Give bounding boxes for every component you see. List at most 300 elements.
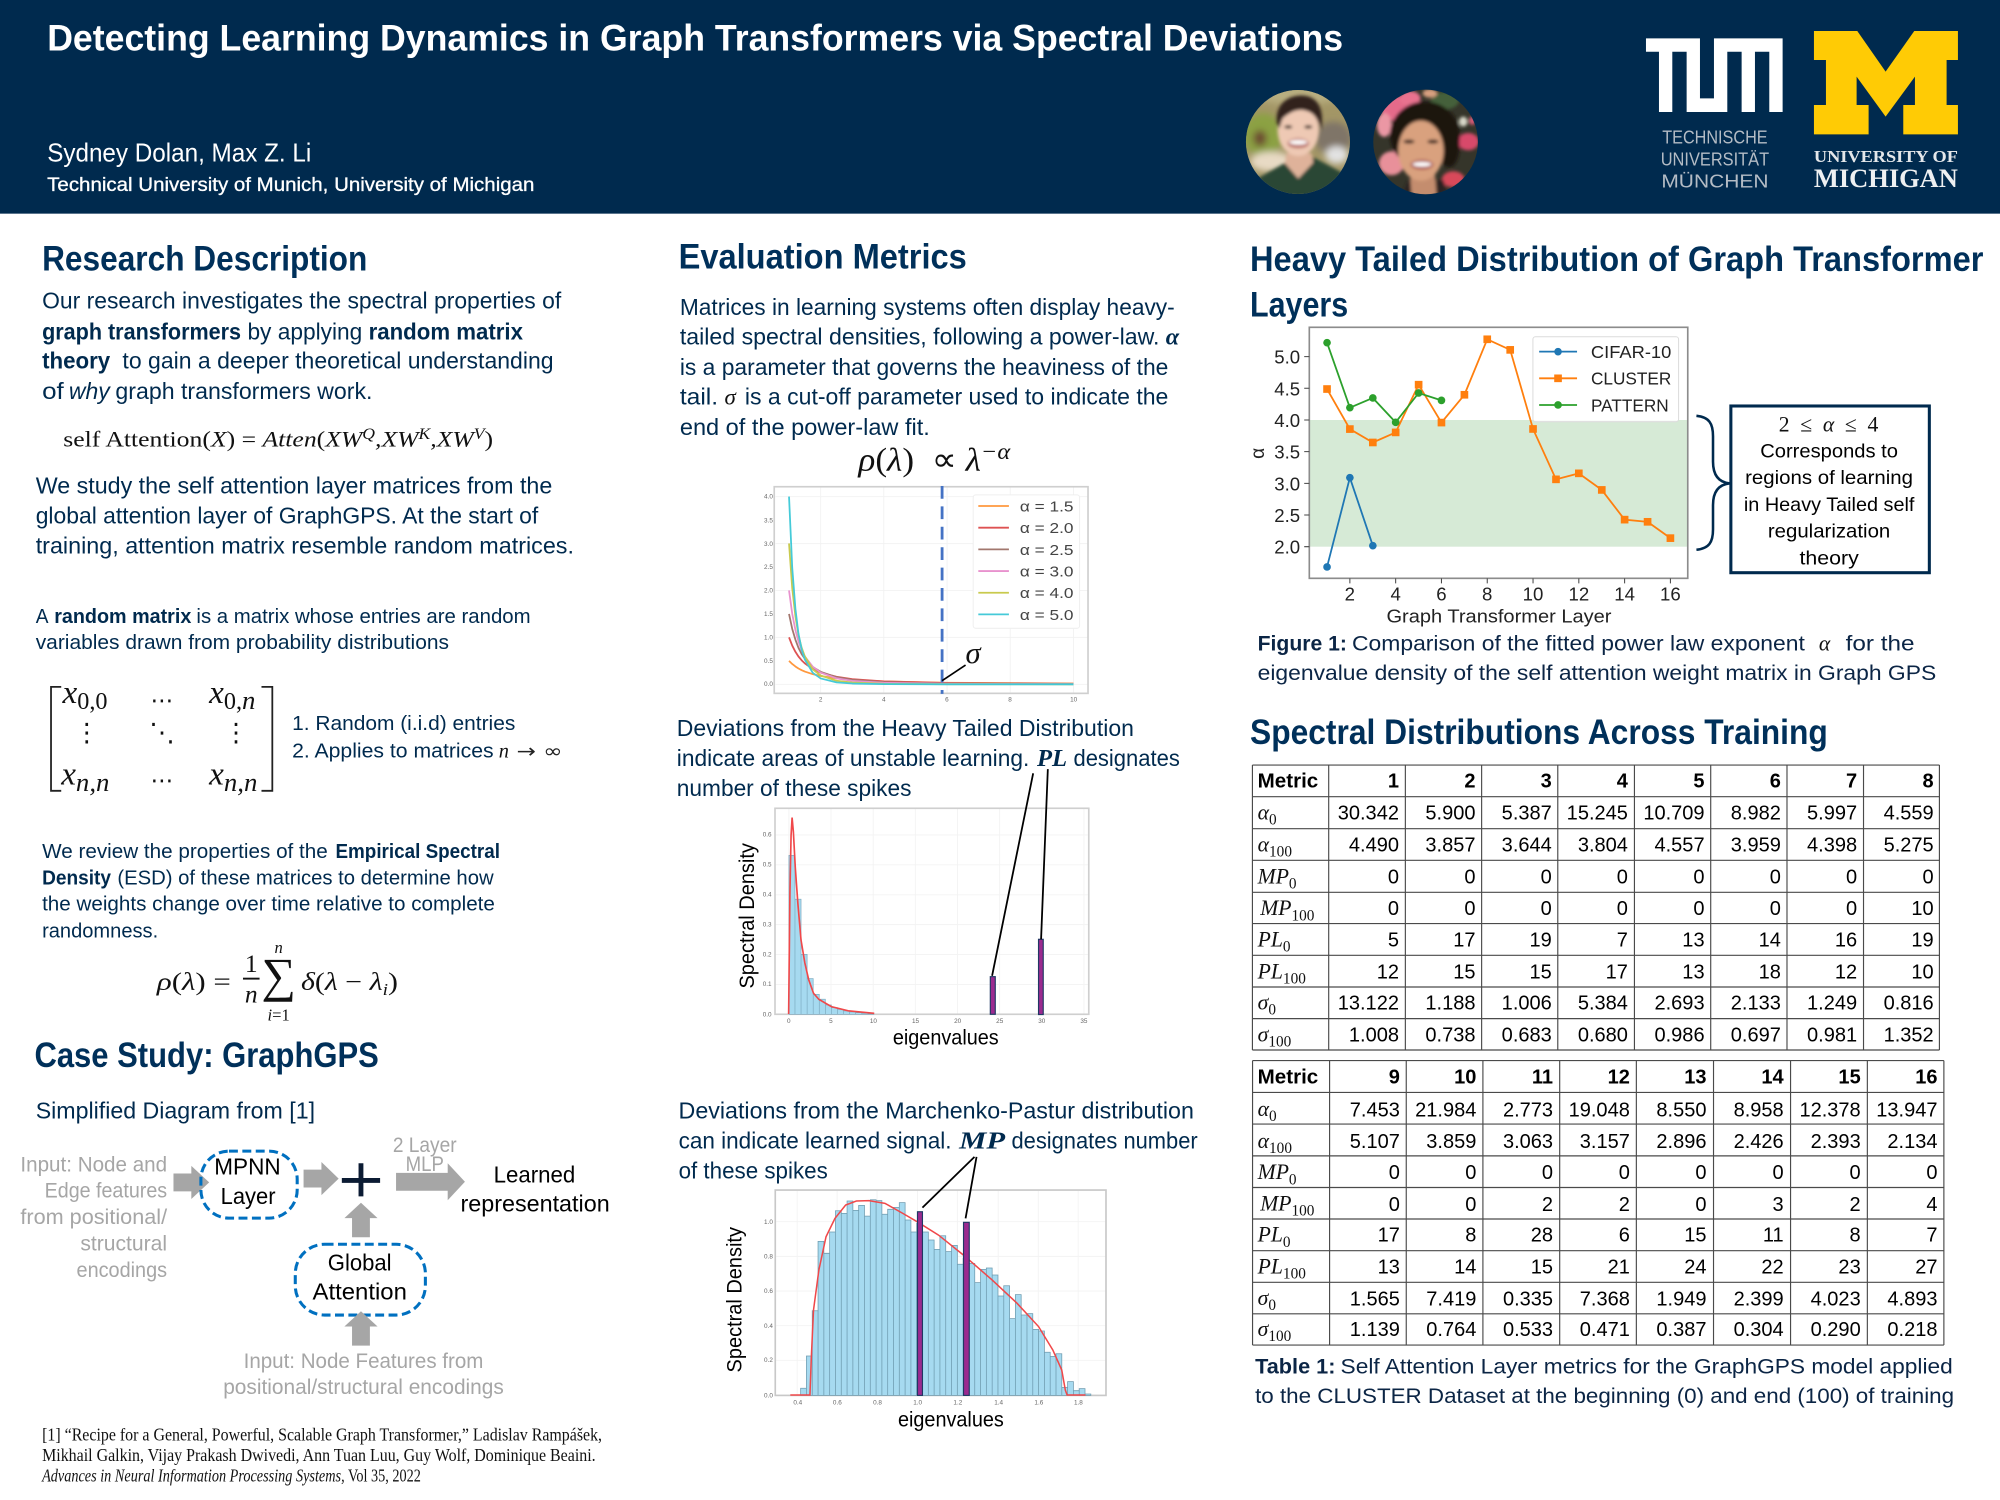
curly brace: [1696, 416, 1730, 550]
table row: alpha 0: 15.245: [1567, 803, 1628, 825]
table row: sigma 100: 0.290: [1811, 1319, 1861, 1341]
table row labels: 100: [1268, 1034, 1292, 1051]
text block: research intro: graph transformers: [42, 318, 241, 344]
axis tick labels: 2: [819, 697, 823, 704]
legend: [973, 495, 1080, 628]
y axis tick labels: 3.0: [1274, 473, 1300, 494]
sigma cut-off marker: σ: [966, 636, 983, 670]
TUM logo: TECHNISCHE: [1662, 126, 1768, 147]
histogram bars: [789, 855, 874, 1014]
text block: power law explanation: Matrices in learning systems often display heavy-: [680, 294, 1175, 320]
author photo: Max Z. Li: [1373, 90, 1478, 194]
icon: plus: [342, 1163, 380, 1196]
text block: research intro: random matrix: [369, 318, 523, 344]
legend: α = 5.0: [1020, 608, 1073, 624]
text block: heavy tailed deviations: [677, 715, 1180, 801]
x axis label: Graph Transformer Layer: [1386, 605, 1611, 626]
heading: case study: Case Study: GraphGPS: [34, 1036, 379, 1075]
table row labels: α: [1258, 801, 1269, 825]
text block: research intro: to gain a deeper theoretical understanding: [122, 348, 554, 374]
table row labels: 0: [1283, 1234, 1291, 1251]
legend: α = 2.5: [1020, 543, 1073, 559]
matrix illustration: ⋯: [151, 688, 173, 714]
table row: alpha 100: 4.557: [1654, 834, 1705, 856]
table header row: 4: [1617, 771, 1629, 793]
tick labels: 15: [912, 1018, 920, 1025]
table row: PL 0: 15: [1684, 1225, 1707, 1247]
heading: spectral distributions: Spectral Distributions Across Training: [1250, 713, 1828, 752]
arrow: global attention to sum: [344, 1203, 378, 1237]
axis tick labels: 1.0: [764, 635, 773, 642]
formula: power law: −α: [981, 439, 1011, 464]
learned representation label: Learned: [494, 1161, 575, 1187]
table row: sigma 0: [1338, 993, 1934, 1015]
text block: heavy tailed deviations: PL: [1036, 745, 1067, 772]
formula: empirical spectral density: ): [388, 967, 398, 996]
tick labels: 5: [829, 1018, 833, 1025]
text block: power law explanation: [680, 294, 1180, 440]
reference citation: Mikhail Galkin, Vijay Prakash Dwivedi, Ann Tuan Luu, Guy Wolf, Dominique Beaini.: [42, 1445, 596, 1465]
TUM logo: [1646, 38, 1783, 192]
table row: MP 0: 0: [1389, 1162, 1400, 1184]
table row: sigma 0: 1.249: [1807, 993, 1857, 1015]
table header row: 16: [1915, 1067, 1937, 1089]
label: 2 layer MLP: [393, 1134, 457, 1176]
table row: PL 0: 19: [1530, 929, 1552, 951]
table header row: 1: [1388, 771, 1399, 793]
table row labels: 100: [1283, 1266, 1306, 1283]
table row: sigma 100: 0.387: [1656, 1319, 1707, 1341]
text block: power law explanation: σ: [724, 384, 737, 409]
tick labels: 1.6: [1034, 1399, 1044, 1406]
table row: MP 0: 0: [1465, 1162, 1476, 1184]
table row labels: σ: [1258, 1317, 1268, 1341]
y axis tick labels: 4.5: [1274, 378, 1300, 399]
header banner: [0, 0, 2000, 214]
tick labels: 0.5: [763, 862, 772, 869]
table row: PL 0: 17: [1453, 929, 1476, 951]
tick labels: [764, 1219, 1083, 1406]
table row: sigma 100: 0.304: [1734, 1319, 1784, 1341]
matrix illustration: 0,: [224, 688, 242, 715]
callout: heavy tailed regime: regularization: [1768, 522, 1890, 543]
text block: heavy tailed deviations: number of these spikes: [677, 775, 911, 801]
table row: sigma 0: 1.565: [1350, 1288, 1400, 1310]
text block: research intro: why: [69, 378, 111, 404]
tick labels: 1.0: [764, 1219, 773, 1226]
chart: Marchenko-Pastur histogram: [722, 1157, 1106, 1432]
reference citation: [41, 1425, 602, 1486]
axis tick labels: 3.5: [764, 517, 773, 524]
chart: alpha by layer: [1248, 327, 1688, 626]
legend: PATTERN: [1591, 395, 1669, 415]
table row: sigma 100: 0.533: [1503, 1319, 1553, 1341]
legend: CLUSTER: [1591, 369, 1671, 389]
heading: heavy tailed distribution: Layers: [1250, 285, 1348, 324]
density curve: [789, 818, 874, 1014]
x axis tick labels: 14: [1614, 584, 1635, 605]
table row: alpha 0: 5.900: [1425, 803, 1476, 825]
matrix illustration: n,n: [76, 767, 109, 797]
table caption: Table 1:: [1255, 1356, 1335, 1379]
MPNN layer box: [201, 1151, 297, 1218]
axis tick labels: [764, 494, 1078, 704]
matrix illustration: x: [209, 755, 224, 792]
table row: sigma 0: 1.006: [1502, 993, 1552, 1015]
table row: MP 100: 0: [1464, 898, 1476, 920]
tick labels: 20: [954, 1018, 962, 1025]
University of Michigan logo: [1814, 31, 1958, 193]
table row labels: MP: [1260, 1191, 1292, 1215]
text block: self attention study: We study the self attention layer matrices from the: [36, 473, 552, 499]
tick labels: 0.4: [793, 1399, 803, 1406]
x axis tick labels: 10: [1523, 584, 1543, 605]
y axis tick labels: 5.0: [1274, 347, 1300, 368]
tick labels: 0: [787, 1018, 791, 1025]
text block: Marchenko-Pastur deviations: [679, 1098, 1198, 1184]
legend: CIFAR-10: [1591, 342, 1671, 362]
diagram subtitle: Simplified Diagram from [1]: [36, 1098, 315, 1124]
text block: Marchenko-Pastur deviations: designates number: [1011, 1128, 1198, 1154]
tick labels: 0.3: [763, 922, 772, 929]
formula: empirical spectral density: i=1: [268, 1005, 290, 1024]
table row: PL 0: 11: [1763, 1225, 1784, 1247]
input label: node and edge features: structural: [80, 1233, 167, 1256]
input label: node and edge features: Input: Node and: [20, 1154, 167, 1177]
tick labels: 0.6: [763, 832, 772, 839]
table row: PL 0: 7: [1617, 929, 1628, 951]
text block: matrix properties: 2. Applies to matrices: [292, 741, 494, 763]
table row: sigma 100: 0.981: [1807, 1024, 1857, 1046]
tick labels: 1.8: [1074, 1399, 1083, 1406]
table row: PL 100: 15: [1453, 961, 1476, 983]
y axis tick labels: 2.5: [1274, 505, 1300, 526]
table row: PL 0: 13: [1682, 929, 1705, 951]
text block: matrix properties: → ∞: [517, 740, 562, 763]
table row: MP 100: 0: [1541, 898, 1552, 920]
text block: matrix properties: n: [499, 741, 509, 763]
table row: alpha 100: 3.644: [1502, 834, 1552, 856]
heading: research description: Research Description: [42, 239, 367, 278]
formula: self attention: ): [485, 426, 493, 451]
table row: PL 100: 13: [1682, 961, 1705, 983]
text block: Marchenko-Pastur deviations: of these spikes: [679, 1158, 828, 1184]
table row: alpha 0: [1350, 1100, 1937, 1122]
text block: self attention study: training, attention matrix resemble random matrices.: [36, 533, 574, 559]
table row labels: 0: [1269, 812, 1277, 829]
table header row: 3: [1541, 771, 1552, 793]
table row: PL 0: [1378, 1225, 1938, 1247]
text block: research intro: of: [42, 378, 64, 404]
axis tick labels: 8: [1008, 697, 1012, 704]
matrix illustration: 0,0: [77, 688, 107, 715]
matrix illustration: x: [209, 674, 224, 711]
table row labels: σ: [1258, 1286, 1268, 1310]
text block: empirical spectral density: Empirical Spectral: [335, 841, 500, 863]
table row: PL 0: 19: [1911, 929, 1934, 951]
text block: power law explanation: is a parameter that governs the heaviness of the: [680, 354, 1168, 380]
table row: MP 100: 2: [1542, 1194, 1553, 1216]
text block: random matrix definition: random matrix: [54, 606, 192, 628]
table row: MP 100: 0: [1693, 898, 1705, 920]
global attention box: Attention: [312, 1279, 407, 1305]
tick labels: 0.6: [764, 1288, 773, 1295]
table row labels: 100: [1292, 907, 1315, 924]
formula: empirical spectral density: n: [245, 980, 258, 1009]
text block: empirical spectral density: randomness.: [42, 920, 158, 942]
table row: PL 100: 15: [1530, 961, 1552, 983]
panel: evaluation metrics: [677, 237, 1198, 1432]
callout: heavy tailed regime: 2 ≤ α ≤ 4: [1779, 413, 1878, 437]
table row: PL 100: 24: [1684, 1257, 1707, 1279]
panel: case study: [20, 1036, 610, 1486]
matrix illustration: ⋯: [151, 768, 173, 794]
table row: MP 0: 0: [1541, 866, 1552, 888]
tick labels: 0.2: [763, 952, 772, 959]
table row: alpha 100: 3.857: [1425, 834, 1476, 856]
table row labels: PL: [1258, 959, 1283, 983]
tick labels: 25: [996, 1018, 1004, 1025]
text block: power law explanation: tail.: [680, 383, 718, 409]
label: 2 layer MLP: 2 Layer: [393, 1134, 457, 1157]
table header row: 15: [1838, 1067, 1861, 1089]
text block: power law explanation: end of the power-law fit.: [680, 414, 930, 440]
table row: sigma 100: 0.683: [1502, 1024, 1552, 1046]
x axis label: eigenvalues: [893, 1027, 999, 1050]
table row: alpha 100: 3.804: [1578, 834, 1628, 856]
histogram bars: [801, 1200, 1091, 1395]
axis ticks: [1304, 357, 1670, 583]
legend: [1533, 337, 1679, 422]
table row: sigma 100: 1.352: [1884, 1024, 1934, 1046]
tick labels: 10: [870, 1018, 877, 1025]
arrow: input to global attention: [344, 1311, 378, 1346]
table row: sigma 100: 0.697: [1731, 1024, 1781, 1046]
table row: alpha 100: 3.157: [1580, 1131, 1630, 1153]
table row: alpha 0: 8.550: [1656, 1100, 1707, 1122]
tick labels: 0.8: [764, 1253, 773, 1260]
formula: empirical spectral density: ρ(λ) =: [156, 967, 231, 996]
table row: sigma 100: 0.218: [1887, 1319, 1937, 1341]
label: 2 layer MLP: MLP: [406, 1153, 444, 1176]
table row: sigma 0: 7.419: [1426, 1288, 1476, 1310]
text block: power law explanation: is a cut-off parameter used to indicate the: [745, 383, 1168, 409]
table header row: 10: [1454, 1067, 1476, 1089]
x axis tick labels: 8: [1482, 584, 1492, 605]
callout: heavy tailed regime: [1731, 406, 1929, 573]
text block: heavy tailed deviations: Deviations from the Heavy Tailed Distribution: [677, 715, 1134, 741]
text block: empirical spectral density: We review the properties of the: [42, 841, 328, 863]
table row: MP 0: 0: [1388, 866, 1399, 888]
table row: MP 0: 0: [1846, 866, 1857, 888]
table row: sigma 0: 7.368: [1580, 1288, 1630, 1310]
y axis label: Spectral Density: [734, 843, 759, 989]
tick labels: 1.0: [913, 1399, 923, 1406]
table row labels: 100: [1269, 844, 1292, 861]
axis tick labels: 3.0: [764, 541, 773, 548]
table row: PL 100: 14: [1454, 1257, 1476, 1279]
chart: power law curves: [764, 486, 1088, 704]
table caption: Self Attention Layer metrics for the GraphGPS model applied: [1341, 1356, 1953, 1379]
table row: MP 0: 0: [1850, 1162, 1861, 1184]
title: Detecting Learning Dynamics in Graph Transformers via Spectral Deviations: [47, 17, 1343, 58]
table row: sigma 100: 0.738: [1425, 1024, 1476, 1046]
table row labels: Metric: [1258, 771, 1318, 793]
legend: α = 4.0: [1020, 586, 1073, 602]
table row labels: 0: [1283, 939, 1291, 956]
table row: PL 100: 12: [1835, 961, 1857, 983]
table row: sigma 100: 0.986: [1654, 1024, 1705, 1046]
University of Michigan logo: MICHIGAN: [1814, 163, 1958, 193]
table row: MP 100: 0: [1465, 1194, 1476, 1216]
figure caption: for the: [1846, 633, 1915, 656]
table row: MP 0: [1388, 866, 1934, 888]
table row: MP 0: 0: [1542, 1162, 1553, 1184]
table row labels: 0: [1268, 1297, 1276, 1314]
table row labels: 0: [1269, 1108, 1277, 1125]
y axis label: Spectral Density: [722, 1227, 747, 1372]
table header row: 5: [1693, 771, 1705, 793]
tick labels: 0.6: [833, 1399, 842, 1406]
table row: MP 100: 3: [1773, 1194, 1784, 1216]
table row labels: 0: [1289, 1171, 1297, 1188]
formula: self attention: self Attention( X) = Atten (XW: [63, 426, 357, 451]
tick labels: 0.2: [764, 1357, 773, 1364]
table row: alpha 0: 8.958: [1734, 1100, 1784, 1122]
table row: PL 100: 17: [1606, 961, 1628, 983]
table row: MP 100: 0: [1617, 898, 1628, 920]
table row labels: MP: [1258, 1160, 1289, 1184]
table row: alpha 100: 5.107: [1350, 1131, 1400, 1153]
table header row: 8: [1923, 771, 1934, 793]
table row: sigma 0: 2.399: [1734, 1288, 1784, 1310]
text block: research intro: theory: [42, 348, 110, 374]
arrow: MPNN to sum: [304, 1162, 339, 1195]
table row: PL 0: 14: [1759, 929, 1781, 951]
table row: PL 0: 8: [1465, 1225, 1476, 1247]
table row: PL 0: 6: [1619, 1225, 1630, 1247]
table row: alpha 0: 21.984: [1415, 1100, 1476, 1122]
table row: PL 100: 22: [1761, 1257, 1784, 1279]
table row: MP 0: 0: [1926, 1162, 1937, 1184]
x axis tick labels: 4: [1390, 584, 1401, 605]
table row: sigma 0: 4.893: [1887, 1288, 1937, 1310]
table row: MP 100: 4: [1926, 1194, 1937, 1216]
tick labels: 0.1: [763, 981, 772, 988]
y axis tick labels: 4.0: [1274, 410, 1300, 431]
table row: sigma 0: 13.122: [1338, 993, 1399, 1015]
matrix illustration: n: [242, 685, 255, 715]
table row labels: σ: [1258, 1022, 1268, 1046]
learned representation label: [460, 1161, 610, 1217]
text block: self attention study: global attention layer of GraphGPS. At the start of: [36, 503, 539, 529]
input label: node features: [223, 1350, 504, 1399]
table row labels: MP: [1258, 864, 1289, 888]
learned representation label: representation: [460, 1191, 610, 1217]
panel: research description: [36, 239, 574, 1024]
table row: sigma 100: 0.764: [1426, 1319, 1476, 1341]
legend: α = 3.0: [1020, 565, 1073, 581]
y axis tick labels: 3.5: [1274, 442, 1300, 463]
text block: Marchenko-Pastur deviations: Deviations from the Marchenko-Pastur distribution: [679, 1098, 1194, 1124]
curves: [789, 497, 1073, 684]
table row: MP 0: 0: [1619, 1162, 1630, 1184]
tick labels: [763, 832, 1088, 1025]
table row labels: 100: [1269, 1140, 1292, 1157]
University of Michigan logo: UNIVERSITY OF: [1814, 147, 1958, 166]
formula: empirical spectral density: δ(λ − λ: [301, 967, 381, 996]
table row: PL 100: 12: [1377, 961, 1399, 983]
table row labels: α: [1258, 1097, 1269, 1121]
table header row: 9: [1389, 1067, 1400, 1089]
table row labels: PL: [1258, 1255, 1283, 1279]
TUM logo: UNIVERSITÄT: [1661, 149, 1769, 170]
heading: heavy tailed distribution: [1250, 240, 1984, 324]
x axis tick labels: 12: [1568, 584, 1589, 605]
table row: PL 0: [1388, 929, 1934, 951]
table row labels: 100: [1268, 1328, 1292, 1345]
table row: alpha 0: 12.378: [1799, 1100, 1861, 1122]
table row: sigma 0: 0.335: [1503, 1288, 1553, 1310]
legend: α = 1.5: [1020, 499, 1073, 515]
table row: PL 0: 7: [1926, 1225, 1937, 1247]
MPNN layer box: Layer: [221, 1183, 276, 1209]
heading: evaluation metrics: Evaluation Metrics: [679, 237, 967, 276]
input label: node and edge features: Edge features: [45, 1180, 167, 1203]
axis tick labels: 0.0: [764, 681, 773, 688]
table header row: 11: [1532, 1067, 1553, 1089]
table row: MP 100: 0: [1695, 1194, 1707, 1216]
formula: self attention: Q: [362, 426, 375, 443]
table row: MP 100: [1389, 1194, 1938, 1216]
input label: node and edge features: [20, 1154, 167, 1282]
table row labels: PL: [1258, 927, 1283, 951]
text block: empirical spectral density: [42, 841, 500, 942]
table row: PL 100: 13: [1378, 1257, 1400, 1279]
sigma cut-off marker: [942, 486, 983, 694]
table row: PL 100: [1378, 1257, 1938, 1279]
table row: alpha 100: [1349, 834, 1934, 856]
text block: power law explanation: α: [1166, 323, 1180, 350]
table header row: 6: [1770, 771, 1781, 793]
table caption: [1255, 1356, 1954, 1408]
table row: alpha 0: [1338, 803, 1934, 825]
text block: Marchenko-Pastur deviations: MP: [958, 1128, 1005, 1155]
formula: power law: ρ(λ) ∝ λ: [858, 442, 980, 479]
tick labels: 35: [1080, 1018, 1088, 1025]
table row: MP 100: 0: [1388, 898, 1399, 920]
table row: sigma 100: 0.680: [1578, 1024, 1628, 1046]
callout: heavy tailed regime: in Heavy Tailed self: [1744, 495, 1915, 516]
input label: node and edge features: from positional/: [20, 1206, 167, 1229]
table row: sigma 100: [1349, 1024, 1934, 1046]
text block: random matrix definition: A: [36, 606, 49, 628]
MPNN layer box: MPNN: [214, 1154, 281, 1180]
formula: self attention: V: [474, 426, 486, 443]
axis tick labels: 10: [1070, 697, 1078, 704]
formula: empirical spectral density: ∑: [261, 950, 296, 1003]
axis tick labels: 4.0: [764, 494, 773, 501]
table row labels: 0: [1268, 1002, 1276, 1019]
table row: sigma 0: 2.693: [1654, 993, 1705, 1015]
table row: alpha 0: 19.048: [1569, 1100, 1630, 1122]
table row: PL 100: 27: [1915, 1257, 1937, 1279]
input label: node and edge features: encodings: [77, 1259, 167, 1282]
x axis tick labels: 6: [1436, 584, 1447, 605]
x axis label: eigenvalues: [898, 1409, 1004, 1432]
y axis tick labels: [1274, 347, 1300, 558]
x axis tick labels: 16: [1660, 584, 1681, 605]
